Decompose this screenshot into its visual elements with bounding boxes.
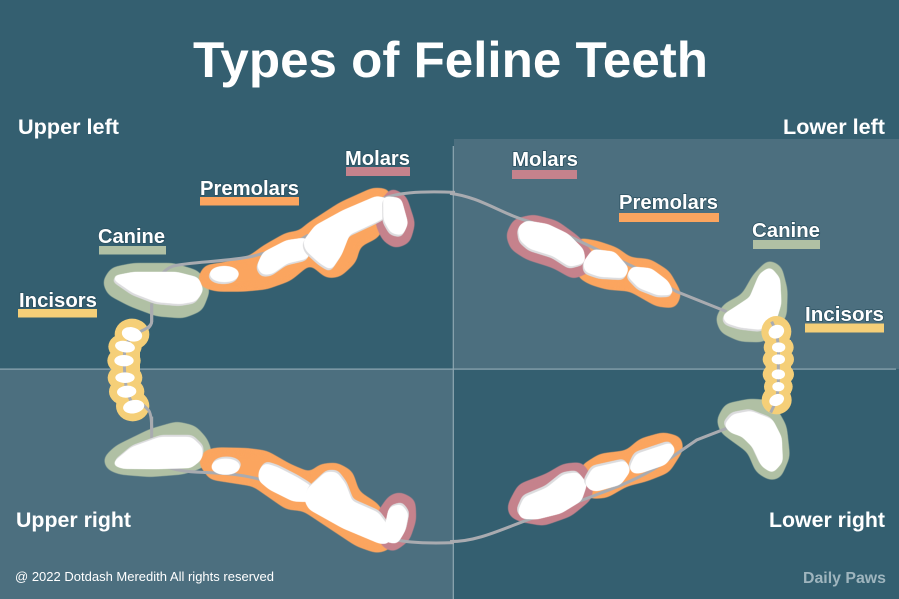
premolar tooth 3 <box>305 197 388 268</box>
heading: lower left: Lower left <box>783 116 885 139</box>
label: lower canine: Canine <box>752 220 820 242</box>
gum line <box>124 303 152 430</box>
label: lower incisors: Incisors <box>805 304 884 326</box>
premolar gum <box>198 188 390 291</box>
gum line <box>450 193 727 312</box>
label: lower molars: Molars <box>512 149 578 171</box>
logo: Daily Paws: Daily Paws <box>803 570 886 587</box>
canine tooth <box>726 412 781 472</box>
molar tooth <box>519 222 584 265</box>
premolar tooth 1 <box>211 267 238 281</box>
heading: upper right: Upper right <box>16 509 131 532</box>
heading: lower right: Lower right <box>769 509 885 532</box>
canine gum <box>717 400 789 480</box>
premolar tooth 2 <box>586 462 629 490</box>
canine gum <box>103 264 209 317</box>
canine tooth <box>113 438 201 468</box>
premolar tooth 2 <box>260 465 311 501</box>
gum line <box>152 417 454 543</box>
canine tooth <box>113 273 202 303</box>
title: Types of Feline Teeth <box>193 32 708 88</box>
label: upper incisors: Incisors <box>19 290 97 312</box>
molar gum <box>507 215 593 278</box>
molar tooth <box>385 197 407 234</box>
gum line <box>140 192 455 333</box>
premolar tooth 3 <box>628 268 673 294</box>
gum line <box>771 322 779 413</box>
copyright: @ 2022 Dotdash Meredith All rights reserved <box>15 570 274 584</box>
premolar gum <box>577 238 681 307</box>
canine gum <box>104 422 211 476</box>
incisor gum <box>761 316 794 414</box>
incisor teeth <box>114 325 145 415</box>
lower left teeth <box>450 193 787 341</box>
label: upper molars: Molars <box>345 148 410 170</box>
premolar tooth 2 <box>258 239 310 273</box>
heading: upper left: Upper left <box>18 116 119 139</box>
incisor teeth <box>766 322 786 408</box>
canine gum <box>716 261 787 341</box>
premolar tooth 3 <box>306 473 389 542</box>
upper left teeth <box>103 188 455 333</box>
molar gum <box>376 188 414 248</box>
canine tooth <box>724 268 780 328</box>
gum line <box>450 428 727 542</box>
upper right teeth <box>104 417 454 552</box>
premolar tooth 2 <box>585 251 627 277</box>
molar gum <box>508 463 593 525</box>
lower right teeth <box>450 400 789 542</box>
molar gum <box>377 493 415 551</box>
label: upper premolars: Premolars <box>200 178 299 200</box>
label: upper canine: Canine <box>98 226 165 248</box>
premolar gum <box>199 448 391 552</box>
molar tooth <box>519 474 586 518</box>
premolar gum <box>581 433 682 498</box>
panel: lower left quadrant shade <box>454 139 899 369</box>
premolar tooth 1 <box>212 460 239 473</box>
lower incisors <box>761 316 794 414</box>
premolar tooth 3 <box>631 444 674 472</box>
panel: upper right quadrant shade <box>0 369 453 599</box>
upper incisors <box>107 303 152 430</box>
molar tooth <box>386 505 407 542</box>
incisor gum <box>107 319 149 421</box>
label: lower premolars: Premolars <box>619 192 718 214</box>
